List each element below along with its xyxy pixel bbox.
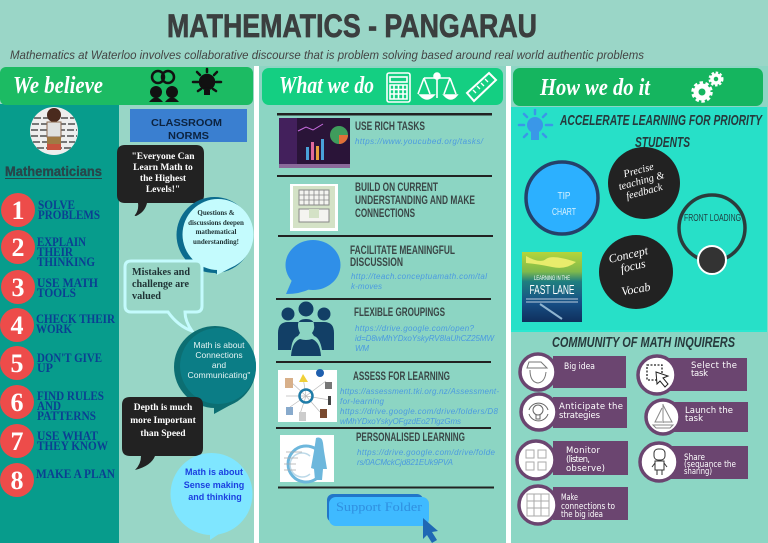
circle: concept focus vocab: Concept	[607, 243, 650, 266]
card: monitor	[517, 441, 628, 479]
speech bubble: sense making: Sense making	[184, 480, 244, 490]
list item 2: THINKING	[37, 255, 95, 269]
heading: how we do it	[513, 68, 763, 106]
card: launch the task: task	[685, 414, 703, 424]
list item 6: AND	[37, 399, 61, 413]
heading: accelerate learning: STUDENTS	[635, 134, 690, 151]
card: select the task	[638, 356, 747, 394]
item: personalised learning: PERSONALISED LEARNING	[356, 430, 465, 444]
circle: tip chart	[526, 162, 598, 234]
icon: bulb sketch	[529, 403, 548, 421]
icon: face with cap	[527, 362, 547, 383]
card: monitor: observe)	[566, 464, 605, 474]
card: share: (sequance the	[684, 460, 736, 470]
icon: portrait of mathematician	[30, 107, 78, 155]
item: flexible groupings: id=D8wMhYDxoYskyRV8IaUhCZ25MW	[355, 334, 495, 343]
panel: how we do it	[511, 66, 768, 543]
card: anticipate the strategies	[521, 394, 627, 430]
card: make connections	[519, 486, 628, 524]
speech bubble: everyone can learn	[117, 145, 204, 216]
item: assess for learning: https://assessment.tki.org.nz/Assessment-	[340, 387, 499, 396]
item: build on current understanding: CONNECTIONS	[355, 206, 415, 220]
heading: mathematicians: Mathematicians	[5, 163, 102, 179]
heading: classroom norms	[130, 109, 247, 142]
card: launch the task	[646, 400, 748, 434]
item: flexible groupings: FLEXIBLE GROUPINGS	[354, 305, 445, 319]
list item 3: USE MATH	[37, 276, 98, 290]
item: facilitate meaningful discussion: FACILITATE MEANINGFUL	[350, 243, 455, 257]
button: support folder	[327, 494, 438, 543]
item: flexible groupings: WM	[355, 344, 369, 353]
speech bubble: everyone can learn: Learn Math to	[133, 163, 193, 173]
icon: blue speech bubble	[286, 240, 340, 294]
circle: concept focus vocab	[599, 235, 673, 309]
speech bubble: connections and communicating: and	[212, 360, 226, 370]
speech bubble: depth over speed: than Speed	[140, 429, 186, 439]
list item 1: PROBLEMS	[38, 208, 100, 222]
circle: tip chart: TIP	[558, 191, 571, 202]
item: assess for learning: https://drive.google.com/drive/folders/D8	[340, 407, 499, 416]
list item 4	[0, 308, 116, 342]
list item 1: 1	[12, 196, 24, 225]
card: make connections: the big idea	[561, 510, 603, 520]
list item 3	[1, 270, 98, 304]
speech bubble: connections and communicating: Math is about	[193, 340, 245, 350]
speech bubble: connections and communicating: Connections	[195, 350, 243, 360]
list item 2: THEIR	[37, 245, 74, 259]
icon: balance scales	[418, 73, 457, 99]
speech bubble: everyone can learn: "Everyone Can	[131, 152, 195, 162]
circle: front loading: FRONT LOADING	[684, 213, 741, 224]
list item 7: USE WHAT	[37, 429, 99, 443]
heading: classroom norms: NORMS	[168, 130, 209, 142]
heading: we believe: We believe	[13, 73, 103, 99]
heading: what we do: What we do	[279, 73, 374, 99]
item: build on current understanding	[277, 175, 492, 231]
title: MATHEMATICS - PANGARAU	[167, 8, 537, 44]
heading: classroom norms: CLASSROOM	[151, 117, 222, 129]
circle: precise teaching and feedback: teaching &	[618, 170, 667, 193]
circle: precise teaching and feedback	[608, 147, 680, 219]
image: purple chart collage	[279, 118, 350, 168]
list item 1: SOLVE	[38, 198, 75, 212]
speech bubble: mistakes and challenge: challenge are	[132, 279, 189, 290]
image: assessment diagram	[278, 369, 337, 422]
speech bubble: connections and communicating	[174, 326, 256, 414]
button: support folder: Support Folder	[336, 499, 423, 514]
icon: calculator	[387, 73, 410, 102]
card: anticipate the strategies: Anticipate the	[559, 402, 623, 412]
icon: light bulb	[193, 69, 221, 95]
item: personalised learning: rs/0ACMckCjd821EUk9PVA	[357, 458, 453, 467]
circle: precise teaching and feedback: feedback	[625, 182, 664, 202]
item: facilitate meaningful discussion: DISCUSSION	[350, 255, 403, 269]
item: flexible groupings: https://drive.google.com/open?	[355, 324, 475, 333]
speech bubble: mistakes and challenge: valued	[132, 291, 161, 302]
speech bubble: sense making	[170, 453, 252, 540]
list item 6: FIND RULES	[37, 389, 104, 403]
item: personalised learning: https://drive.google.com/drive/folde	[357, 448, 496, 457]
icon: group of people	[278, 302, 334, 356]
item: personalised learning	[276, 427, 496, 488]
speech bubble: sense making: Math is about	[185, 467, 243, 477]
card: select the task: task	[691, 369, 708, 379]
card: select the task: Select the	[691, 361, 737, 371]
list item 8: MAKE A PLAN	[36, 467, 115, 481]
list item 1	[1, 193, 100, 227]
icon: puzzle pieces	[526, 450, 546, 470]
speech bubble: mistakes and challenge: Mistakes and	[132, 267, 190, 278]
list item 5: DON'T GIVE	[37, 351, 102, 365]
speech bubble: depth over speed: Depth is much	[134, 403, 193, 413]
list item 6	[0, 385, 104, 423]
list item 4: CHECK THEIR	[36, 312, 116, 326]
icon: sailboat	[653, 404, 673, 428]
list item 4: WORK	[36, 322, 72, 336]
list item 6: PATTERNS	[37, 409, 96, 423]
item: build on current understanding: UNDERSTANDING AND MAKE	[355, 193, 475, 207]
subtitle: Mathematics at Waterloo involves collaborative discourse that is problem solving based around real world authentic problems	[10, 48, 644, 62]
speech bubble: questions and discussions: Questions &	[197, 209, 235, 217]
list item 3: TOOLS	[37, 286, 76, 300]
circle: front loading	[679, 195, 745, 274]
circle: concept focus vocab: focus	[619, 256, 647, 276]
speech bubble: sense making: and thinking	[188, 492, 242, 502]
image: array grid card	[290, 184, 338, 231]
panel: what we do	[259, 66, 511, 543]
list item 2: 2	[12, 233, 24, 262]
card: share	[640, 443, 748, 481]
icon: blue light bulb	[519, 110, 552, 140]
panel: we believe	[0, 66, 259, 543]
card: make connections: Make	[561, 493, 578, 503]
speech bubble: depth over speed: more Important	[130, 416, 197, 426]
list item 5: UP	[37, 361, 53, 375]
card: anticipate the strategies: strategies	[559, 411, 601, 421]
heading: accelerate learning	[559, 112, 763, 151]
item: use rich tasks	[277, 113, 492, 168]
icon: cartoon child	[652, 449, 667, 475]
heading: how we do it: How we do it	[539, 75, 651, 101]
card: monitor: (listen,	[566, 455, 590, 465]
list item 3: 3	[12, 273, 24, 302]
icon: gears	[692, 72, 722, 102]
item: assess for learning: for-learning	[340, 397, 385, 406]
list item 7	[0, 424, 108, 458]
item: use rich tasks: https://www.youcubed.org/tasks/	[355, 137, 484, 146]
image: learning in the fast lane book: FAST LANE	[530, 282, 575, 297]
icon: jigsaw grid	[527, 494, 549, 516]
list item 8: 8	[10, 466, 24, 495]
speech bubble: connections and communicating: Communicating"	[188, 370, 250, 380]
item: facilitate meaningful discussion	[278, 235, 493, 294]
card: big idea: Big idea	[564, 362, 595, 372]
item: assess for learning: ASSESS FOR LEARNING	[353, 369, 450, 383]
list item 4: 4	[10, 311, 24, 340]
speech bubble: questions and discussions: discussions deepen	[188, 219, 244, 227]
circle: tip chart: CHART	[552, 207, 576, 218]
item: assess for learning: wMhYDxoYskyOFgzdEo2TlgzGms	[340, 417, 461, 426]
circle: precise teaching and feedback: Precise	[621, 162, 656, 181]
image: learning in the fast lane book	[522, 252, 582, 322]
icon: ruler	[467, 73, 496, 101]
list item 2	[1, 230, 95, 269]
icon: cursor selection	[647, 365, 668, 387]
card: monitor: Monitor	[566, 446, 600, 456]
speech bubble: questions and discussions: mathematical	[196, 228, 236, 236]
speech bubble: questions and discussions	[176, 197, 254, 275]
item: use rich tasks: USE RICH TASKS	[355, 119, 425, 133]
card: big idea	[520, 354, 626, 390]
item: facilitate meaningful discussion: k-moves	[351, 282, 382, 291]
list item 7: 7	[10, 427, 24, 456]
speech bubble: depth over speed	[122, 397, 203, 470]
speech bubble: everyone can learn: the Highest	[140, 174, 187, 184]
icon: cursor arrow	[423, 518, 438, 543]
speech bubble: everyone can learn: Levels!"	[146, 185, 180, 195]
card: launch the task: Launch the	[685, 406, 733, 416]
image: learner diagram	[280, 435, 334, 482]
list item 5: 5	[10, 349, 24, 378]
item: assess for learning	[276, 361, 499, 426]
list item 6: 6	[10, 388, 24, 417]
card: share: Share	[684, 453, 705, 463]
image: learning in the fast lane book: LEARNING IN THE	[534, 276, 570, 282]
list item 7: THEY KNOW	[37, 439, 108, 453]
speech bubble: questions and discussions: understanding!	[193, 238, 239, 246]
list item 8	[0, 463, 115, 497]
list item 2: EXPLAIN	[37, 235, 86, 249]
heading: what we do	[262, 68, 503, 105]
circle: concept focus vocab: Vocab	[620, 280, 651, 298]
icon: two people thinking	[149, 71, 179, 102]
card: make connections: connections to	[561, 502, 615, 512]
item: build on current understanding: BUILD ON CURRENT	[355, 180, 438, 194]
list item 5	[0, 346, 102, 380]
heading: we believe	[0, 67, 253, 105]
card: share: sharing)	[684, 467, 712, 477]
item: flexible groupings	[276, 298, 495, 356]
item: facilitate meaningful discussion: http://teach.conceptuamath.com/tal	[351, 272, 487, 281]
speech bubble: mistakes and challenge	[125, 261, 202, 331]
